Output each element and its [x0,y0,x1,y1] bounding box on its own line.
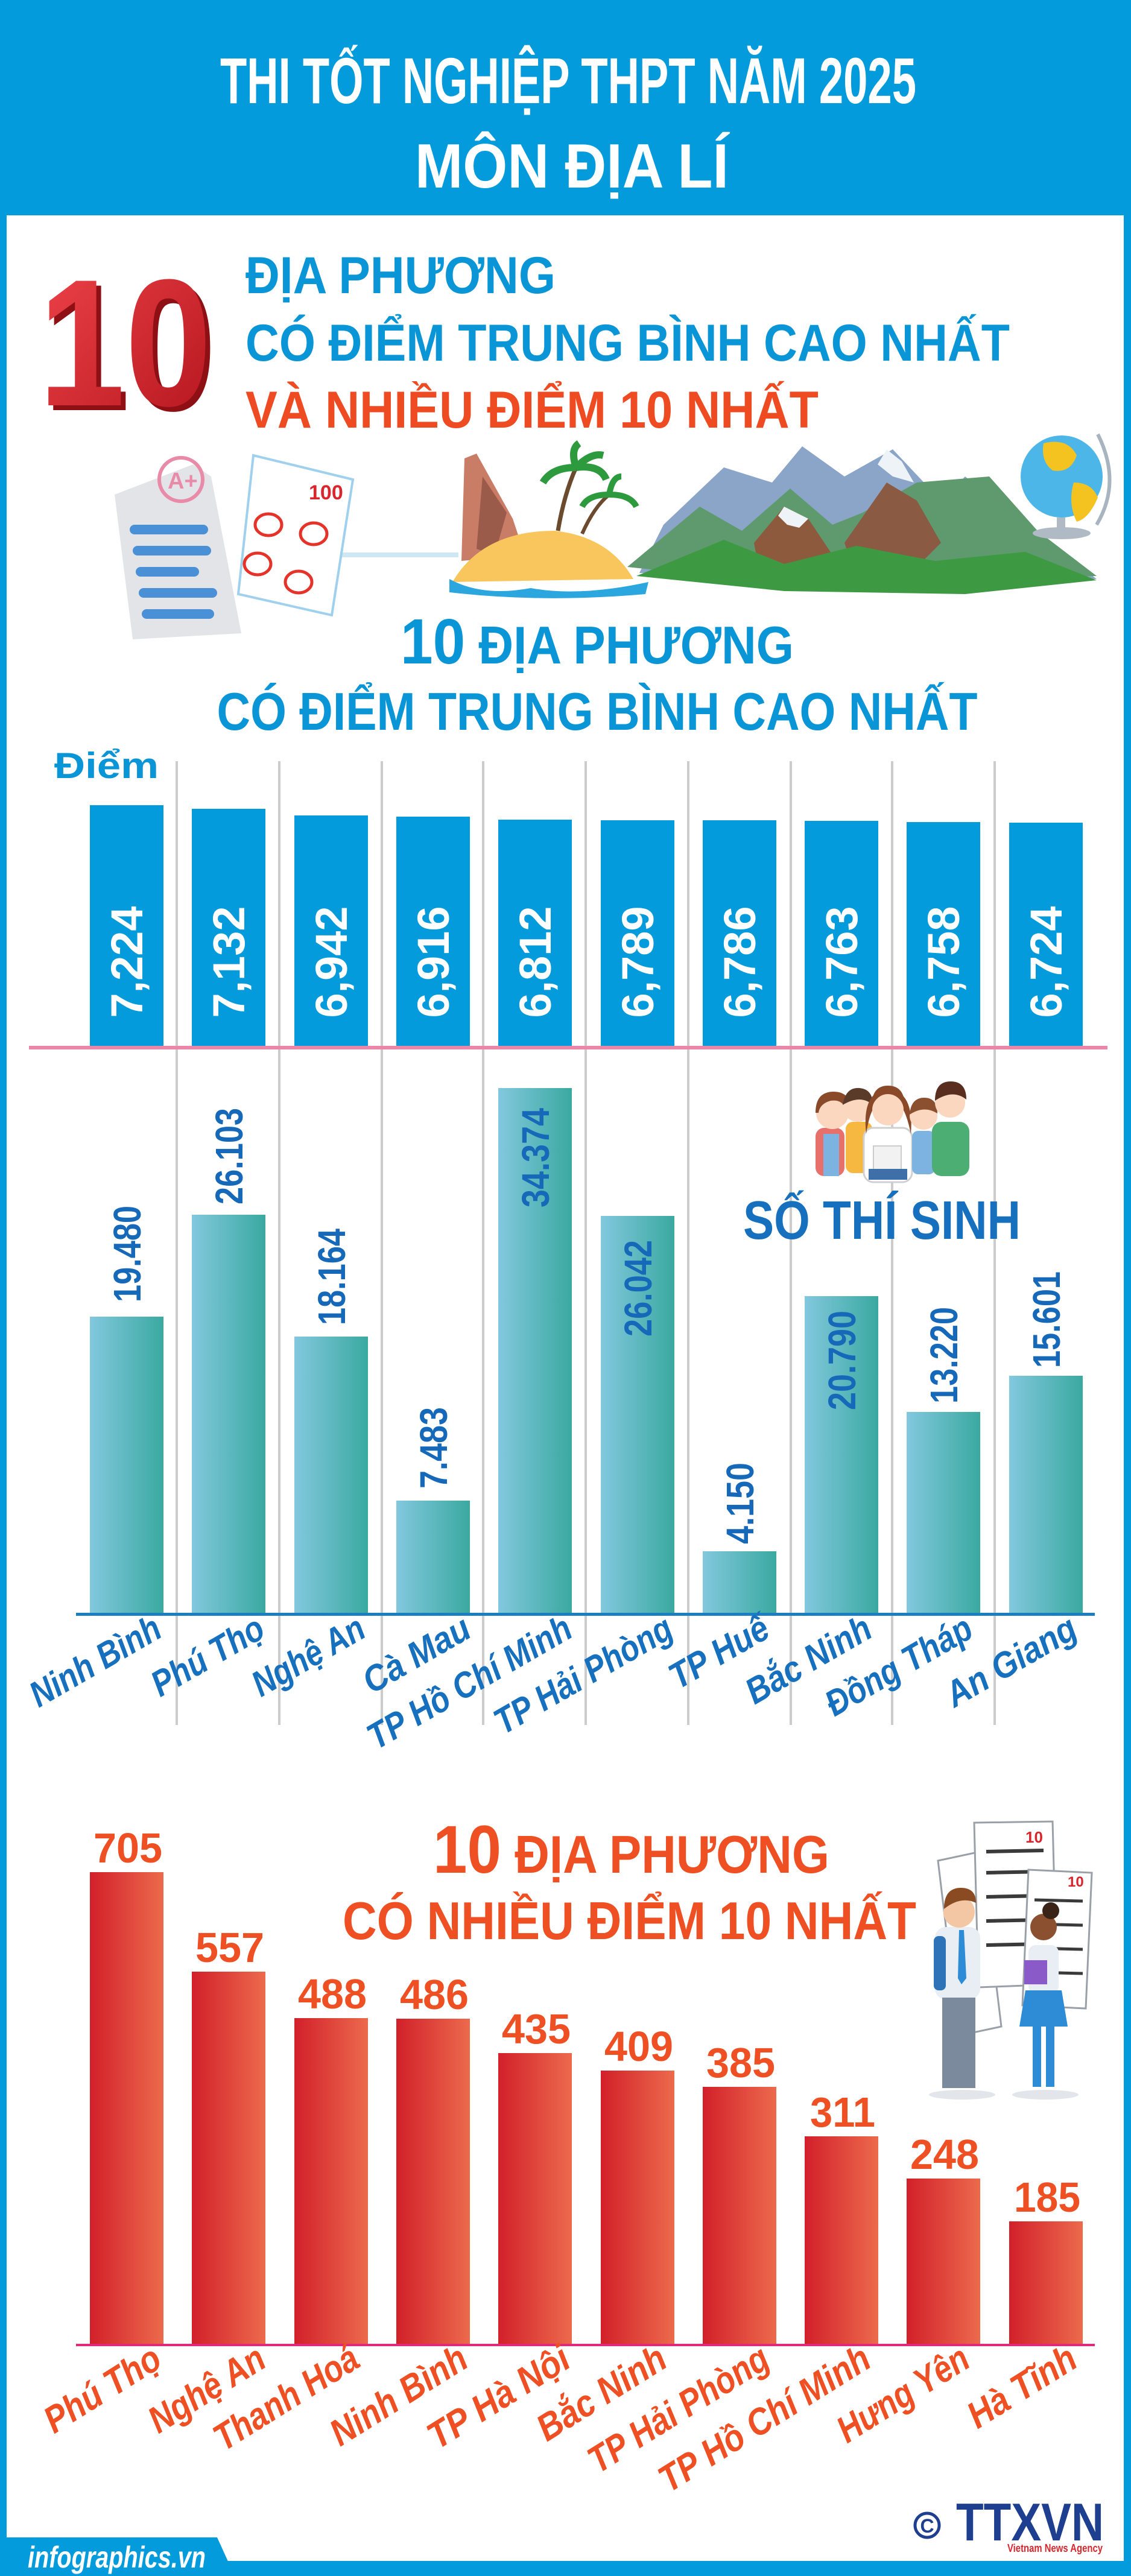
icon: mountains [627,446,1097,594]
x-axis labels: 10-point chart: Phú Thọ [37,2337,168,2442]
bar chart: average scores: 6,812 [510,906,560,1018]
bar chart: number of candidates: 13.220 [922,1307,966,1404]
bar chart: number of 10-point scores: 409 [604,2023,673,2070]
icon: big red 10: 10 [39,241,212,444]
heading: intro text: ĐỊA PHƯƠNG [246,247,556,305]
heading: intro text [246,247,1010,439]
logo: TTXVN: C [920,2515,934,2537]
x-axis labels: 10-point chart: Hà Tĩnh [960,2337,1084,2437]
x-axis labels: 10-point chart: TP Hải Phòng [581,2337,776,2481]
x-axis labels: average score chart: Đồng Tháp [818,1607,980,1724]
icon: exam papers [115,455,458,639]
bar chart: number of candidates: 19.480 [106,1206,149,1302]
bar chart: number of candidates: 4.150 [718,1463,762,1544]
bar chart: number of candidates [90,1088,1083,1614]
x-axis labels: average score chart: Cà Mau [355,1607,478,1701]
bar chart: average scores: 6,763 [817,906,867,1018]
bar chart: number of candidates: 15.601 [1025,1271,1068,1368]
footer: infographics.vn tab: infographics.vn [28,2540,206,2574]
heading: intro text: CÓ ĐIỂM TRUNG BÌNH CAO NHẤT [246,314,1010,372]
logo: TTXVN: Vietnam News Agency [1007,2542,1103,2554]
label: Số thí sinh: SỐ THÍ SINH [743,1189,1021,1251]
bar chart: number of 10-point scores: 488 [298,1970,367,2017]
bar chart: number of 10-point scores [90,1824,1083,2345]
heading: average score chart: 10 ĐỊA PHƯƠNG [401,606,794,677]
bar chart: average scores: 6,786 [715,906,765,1018]
icon: students with exam papers [929,1821,1092,2100]
x-axis labels: average score chart: TP Hồ Chí Minh [360,1607,579,1757]
icon: group of students [816,1081,969,1182]
bar chart: average scores: 7,132 [204,906,254,1018]
bar chart: number of 10-point scores: 435 [502,2005,571,2052]
x-axis labels: average score chart: Ninh Bình [22,1607,168,1715]
bar chart: average scores: 6,789 [613,906,663,1018]
icon: big red 10: 10 [43,246,217,449]
heading: average score chart: CÓ ĐIỂM TRUNG BÌNH CAO NHẤT [217,682,977,741]
bar chart: number of 10-point scores: 385 [706,2039,775,2086]
heading: average score chart [217,606,977,741]
x-axis labels: average score chart: Nghệ An [244,1607,372,1704]
bar chart: number of candidates: 7.483 [412,1407,455,1489]
x-axis labels: average score chart: TP Huế [662,1606,779,1697]
header: title: MÔN ĐỊA LÍ [415,131,730,201]
x-axis labels: average score chart: Phú Thọ [144,1607,271,1704]
bar chart: number of candidates: 34.374 [514,1108,557,1207]
bar chart: average scores [90,805,1083,1046]
bar chart: average scores: 7,224 [102,906,152,1018]
icon: globe [1021,434,1110,539]
bar chart: number of 10-point scores: 557 [195,1924,264,1971]
x-axis labels: 10-point chart: TP Hồ Chí Minh [651,2337,878,2501]
heading: intro text: VÀ NHIỀU ĐIỂM 10 NHẤT [246,381,819,439]
x-axis labels: 10-point chart: Hưng Yên [829,2337,977,2451]
axis label: Điểm: Điểm [54,745,159,786]
x-axis labels: 10-point chart: Thanh Hoá [206,2337,366,2459]
bar chart: number of 10-point scores: 705 [93,1824,162,1872]
heading: most 10-point scores: 10 ĐỊA PHƯƠNG [433,1812,829,1887]
icon: exam papers: A+ [168,469,198,494]
x-axis labels: 10-point chart [37,2337,1084,2501]
x-axis labels: 10-point chart: Ninh Bình [323,2337,475,2454]
x-axis labels: average score chart: An Giang [937,1607,1083,1715]
icon: island with palms [449,443,648,598]
bar chart: number of 10-point scores: 185 [1014,2174,1080,2221]
bar chart: average scores: 6,942 [306,906,356,1018]
icon: students with exam papers: 10 [1068,1874,1084,1890]
x-axis labels: 10-point chart: Bắc Ninh [529,2337,674,2449]
heading: most 10-point scores [343,1812,916,1951]
bar chart: average scores: 6,916 [408,906,458,1018]
bar chart: number of candidates: 26.042 [616,1240,660,1337]
bar chart: number of 10-point scores: 311 [810,2089,875,2136]
bar chart: number of 10-point scores: 248 [910,2131,979,2178]
x-axis labels: average score chart: TP Hải Phòng [487,1607,679,1742]
x-axis labels: 10-point chart: Nghệ An [141,2337,273,2442]
bar chart: number of candidates: 20.790 [820,1311,864,1410]
heading: most 10-point scores: CÓ NHIỀU ĐIỂM 10 NHẤT [343,1891,916,1951]
bar chart: number of 10-point scores: 486 [400,1971,469,2018]
logo: TTXVN [915,2492,1104,2554]
x-axis labels: average score chart: Bắc Ninh [738,1607,878,1712]
bar chart: average scores: 6,758 [919,906,969,1018]
bar chart: number of candidates: 26.103 [208,1108,251,1204]
bar chart: number of candidates: 18.164 [310,1229,353,1325]
x-axis labels: average score chart [22,1606,1083,1757]
logo: TTXVN: TTXVN [956,2492,1104,2552]
x-axis labels: 10-point chart: TP Hà Nội [420,2337,578,2457]
icon: students with exam papers: 10 [1025,1828,1043,1846]
header: title [220,44,916,201]
bar chart: average scores: 6,724 [1021,906,1071,1018]
icon: exam papers: 100 [309,481,343,504]
